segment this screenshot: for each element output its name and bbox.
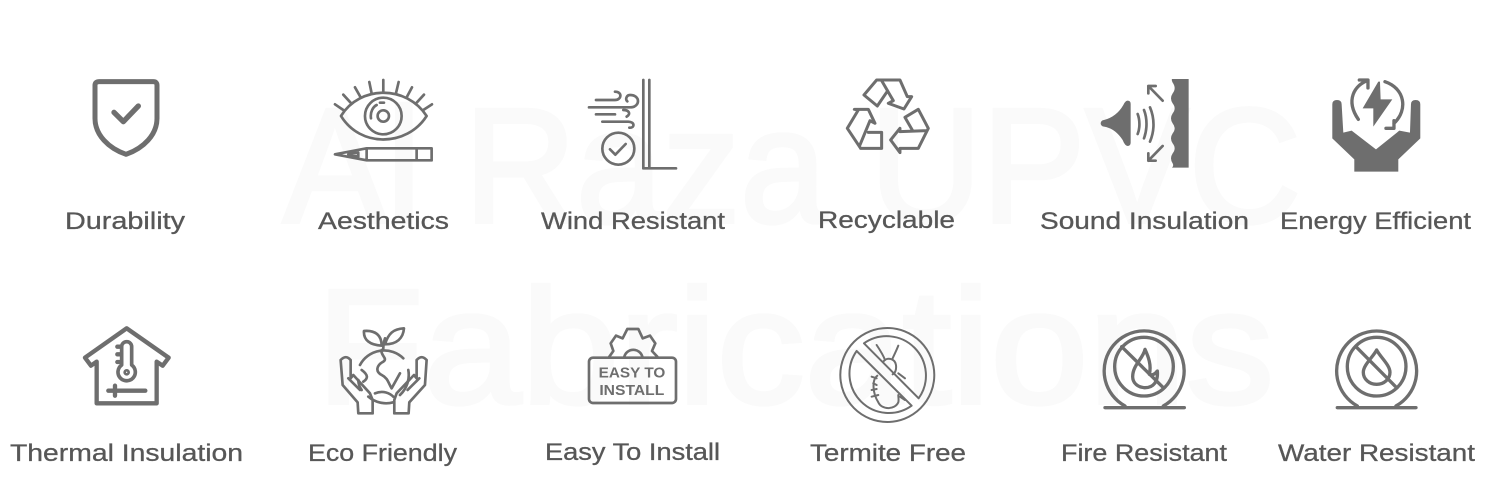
icon: easy to install badge	[589, 329, 676, 403]
badge text line 1: EASY TO	[599, 365, 665, 381]
label: Water Resistant: Water Resistant	[1278, 440, 1475, 467]
label: Thermal Insulation: Thermal Insulation	[10, 440, 243, 467]
label: Aesthetics: Aesthetics	[318, 208, 449, 235]
icon: wind and wall	[589, 80, 676, 168]
badge text line 2: INSTALL	[599, 383, 664, 399]
icon: fire resistant	[1104, 331, 1184, 408]
icon: termite prohibited	[840, 328, 934, 422]
label: Recyclable: Recyclable	[818, 207, 955, 234]
label: Fire Resistant: Fire Resistant	[1061, 440, 1227, 467]
icon: thermal house	[85, 328, 169, 403]
icon: recycle	[847, 80, 928, 153]
label: Termite Free: Termite Free	[810, 440, 966, 467]
scalloped wall	[1171, 79, 1189, 168]
label: Sound Insulation: Sound Insulation	[1040, 208, 1249, 235]
label: Eco Friendly: Eco Friendly	[308, 440, 457, 467]
label: Durability: Durability	[65, 208, 185, 235]
watermark line 2: Fabrications	[316, 255, 1274, 438]
icon: shield	[95, 82, 157, 154]
label: Energy Efficient: Energy Efficient	[1280, 208, 1471, 235]
icon: eye and pencil	[335, 80, 432, 160]
speaker body	[1101, 101, 1131, 146]
label: Easy To Install: Easy To Install	[545, 439, 720, 466]
icon: globe in hands	[341, 328, 427, 413]
watermark line 1: Al Raza UPVC	[283, 74, 1301, 257]
icon: energy hands	[1332, 80, 1420, 172]
icon: water resistant	[1337, 331, 1417, 408]
icon: sound and wall	[1101, 79, 1189, 168]
label: Wind Resistant: Wind Resistant	[541, 208, 725, 235]
